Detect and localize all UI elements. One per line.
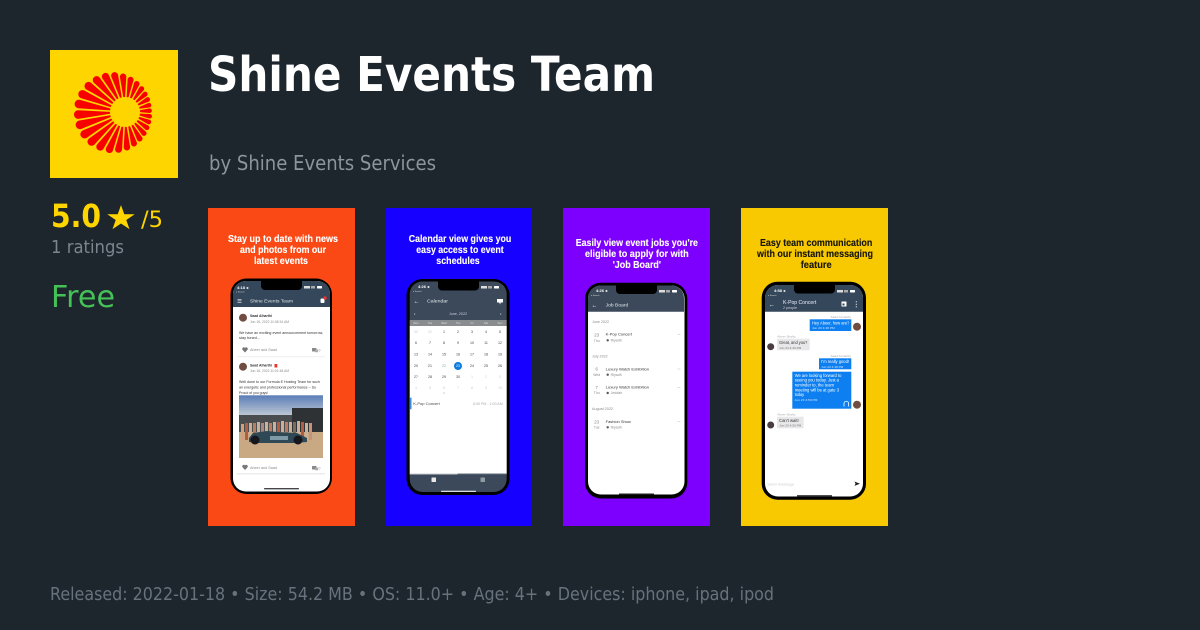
calendar grid: 22 — [442, 364, 446, 368]
calendar grid: 9 — [485, 386, 487, 390]
heading: messaging: Easy team communication — [760, 238, 872, 249]
chat messages: I'm really good! — [821, 359, 849, 364]
heading: calendar: Calendar view gives you — [409, 234, 511, 245]
calendar grid: Sat — [484, 321, 488, 325]
phone: job board: Job Board — [606, 303, 629, 309]
calendar grid: 4 — [485, 330, 487, 334]
phone: messaging: Send message — [767, 482, 794, 486]
job list: August 2022 — [592, 407, 613, 411]
calendar grid: 7 — [429, 341, 431, 345]
rating score: /5 — [141, 208, 163, 233]
heading: messaging — [756, 238, 873, 271]
calendar grid: 3 — [499, 375, 501, 379]
event row: 5:00 PM - 1:00 AM — [473, 402, 503, 406]
calendar grid: 27 — [414, 375, 418, 379]
chat messages: Hey Abeer, how are? — [812, 320, 850, 326]
event row — [410, 398, 503, 409]
heading: job board — [576, 238, 698, 271]
ratings count: 1 ratings — [51, 237, 124, 258]
phone: calendar: ◂ Search — [413, 290, 422, 293]
job list: 7 — [595, 385, 598, 390]
chat messages: Jun 23 4:49 PM — [821, 365, 844, 369]
screenshot 2: calendar — [385, 208, 532, 526]
phone: messaging: K-Pop Concert — [783, 300, 817, 306]
phone: news feed: Proud of you guys! — [239, 390, 268, 395]
phone: messaging — [762, 282, 866, 500]
calendar grid: 28 — [428, 375, 432, 379]
calendar grid: 24 — [470, 364, 474, 368]
calendar grid: 2 — [457, 330, 459, 334]
photo: team with race car — [239, 395, 323, 458]
calendar grid: 7 — [457, 386, 459, 390]
phone: news feed — [230, 278, 332, 494]
phone: news feed: Abeer and Saad — [250, 466, 277, 470]
phone: news feed: Jun 16, 2022 11:08:34 AM — [250, 320, 289, 324]
calendar grid: 12 — [498, 341, 502, 345]
calendar grid: 3 — [471, 330, 473, 334]
calendar grid: 5 — [499, 330, 501, 334]
chat messages: seeing you today. Just a — [795, 378, 840, 383]
heading: calendar — [409, 234, 511, 267]
phone: messaging: ← — [769, 302, 775, 308]
screenshot 4: messaging — [741, 208, 888, 526]
calendar grid: 6 — [443, 386, 445, 390]
phone: news feed: an energetic and professional performance – So — [239, 384, 317, 390]
calendar grid: Tue — [428, 321, 433, 325]
chat messages: today — [795, 392, 805, 397]
calendar grid: 10 — [470, 341, 474, 345]
calendar grid: 15 — [442, 352, 446, 356]
job list: K-Pop Concert — [606, 332, 633, 337]
phone: job board — [585, 283, 687, 498]
phone: calendar: › — [500, 312, 502, 316]
job list: Riyadh — [611, 338, 622, 342]
job list: 23 — [594, 420, 600, 424]
phone: calendar — [406, 279, 510, 495]
phone: news feed: 4:18 ◂ — [237, 285, 249, 290]
calendar grid: 21 — [428, 364, 432, 368]
phone: messaging: ◂ Search — [768, 294, 777, 297]
calendar grid: 26 — [498, 364, 502, 368]
phone: calendar: June, 2022 — [449, 312, 467, 316]
phone: calendar: ← — [414, 299, 420, 305]
chat messages: Jun 23 4:50 PM — [779, 424, 802, 428]
phone: news feed: 0 — [318, 466, 320, 470]
job list — [592, 320, 680, 430]
chat messages: Jun 23 4:50 PM — [795, 398, 818, 402]
calendar grid: 2 — [485, 375, 487, 379]
title: Shine Events Team — [208, 47, 655, 103]
calendar grid: 6 — [415, 341, 417, 345]
calendar grid: 20 — [414, 364, 418, 368]
developer byline: by Shine Events Services — [209, 151, 436, 175]
app icon: red sunburst on yellow — [50, 50, 178, 178]
job list: July 2022 — [592, 354, 608, 358]
calendar grid: 18 — [484, 352, 488, 356]
job list: June 2022 — [592, 320, 609, 324]
calendar grid: 13 — [414, 352, 418, 356]
job list: Jeddah — [611, 391, 622, 395]
job list: Riyadh — [611, 426, 622, 430]
phone: news feed: Saad Alharthi — [250, 364, 272, 368]
calendar grid: 16 — [456, 352, 460, 356]
job list: Fashion Show — [606, 419, 631, 424]
rating score: 5.0 — [51, 197, 101, 235]
phone: news feed: 0 — [318, 348, 320, 352]
calendar grid: 25 — [484, 364, 488, 368]
calendar grid: Thu — [456, 321, 461, 325]
calendar grid: Fri — [470, 321, 474, 325]
rating score: ★ — [105, 198, 137, 237]
calendar grid: 8 — [471, 386, 473, 390]
job list: Luxury Watch Exhibition — [606, 366, 649, 371]
chat messages: Abeer Shafiq — [777, 334, 796, 338]
heading: messaging: feature — [801, 260, 832, 271]
heading: news: Stay up to date with news — [228, 234, 338, 245]
chat messages: Can't wait! — [779, 418, 799, 423]
calendar grid: 4 — [415, 386, 417, 390]
phone: news feed: Jun 16, 2022 11:01:48 AM — [250, 369, 289, 373]
calendar grid: 5 — [429, 386, 431, 390]
chat messages: meeting will be at gate 3 — [795, 387, 840, 392]
job list: Thu — [594, 391, 600, 395]
phone: news feed: Abeer and Saad — [250, 348, 277, 352]
job list: 6 — [595, 366, 598, 372]
footer metadata: Released: 2022-01-18 • Size: 54.2 MB • OS: 11.0+ • Age: 4+ • Devices: iphone, ipad, ipod — [50, 584, 774, 605]
heading: job board: eligible to apply for with — [585, 249, 689, 260]
chat messages — [767, 315, 861, 428]
event row: K-Pop Concert — [413, 401, 441, 406]
phone: calendar: 4:26 ◂ — [418, 284, 430, 289]
calendar grid: Sun — [498, 321, 503, 325]
calendar grid: 17 — [470, 352, 474, 356]
phone: job board: ◂ Search — [591, 294, 600, 297]
heading: news — [228, 234, 338, 267]
calendar grid: 29 — [442, 375, 446, 379]
screenshot 3: job board — [563, 208, 710, 526]
chat messages: reminder to, the team — [795, 382, 834, 388]
chat messages: We are looking forward to — [795, 373, 842, 378]
heading: job board: Easily view event jobs you're — [576, 238, 698, 249]
screenshot 1: news feed — [208, 208, 355, 526]
phone: messaging: 2 people — [783, 306, 797, 310]
calendar grid: 31 — [428, 330, 432, 334]
calendar grid: 9 — [457, 341, 459, 345]
calendar grid: 14 — [428, 352, 432, 356]
calendar grid: 1 — [443, 391, 445, 395]
chat messages: Abeer Shafiq — [777, 412, 796, 416]
calendar grid: 10 — [498, 386, 502, 390]
phone: news feed: Saad Alharthi — [250, 314, 272, 318]
phone: news feed: We have an exciting event announcement tomorrow, — [239, 330, 323, 335]
calendar grid: 11 — [484, 341, 488, 345]
chat messages: Saad Al Harthi — [831, 315, 851, 319]
heading: news: latest events — [254, 256, 308, 267]
phone: calendar: Calendar — [427, 299, 448, 305]
phone: news feed: Well done to our Formula E Hosting Team for such — [239, 379, 320, 384]
heading: calendar: easy access to event — [416, 245, 504, 256]
calendar grid: Wed — [441, 321, 447, 325]
calendar grid: 1 — [443, 330, 445, 334]
phone: calendar: ‹ — [414, 312, 416, 316]
calendar grid: 30 — [456, 375, 460, 379]
calendar grid: 30 — [414, 330, 418, 334]
job list: Tue — [594, 426, 600, 430]
chat messages: Saad Al Harthi — [831, 354, 851, 358]
price: Free — [51, 280, 115, 315]
heading: messaging: with our instant messaging — [756, 249, 873, 260]
phone: news feed: ◂ Search — [236, 290, 245, 294]
phone: news feed: stay tuned... — [239, 335, 260, 340]
heading: job board: 'Job Board' — [613, 260, 661, 271]
job list: Luxury Watch Exhibition — [606, 385, 649, 390]
calendar grid: Mon — [413, 321, 419, 325]
chat messages: Jun 23 4:48 PM — [812, 326, 835, 330]
job list: 23 — [594, 332, 600, 338]
heading: news: and photos from our — [240, 245, 326, 256]
job list: Riyadh — [611, 373, 622, 377]
calendar grid: 19 — [498, 352, 502, 356]
rating score — [51, 197, 163, 237]
calendar grid: 1 — [471, 375, 473, 379]
phone: messaging: 4:58 ◂ — [774, 288, 786, 293]
phone: news feed: Shine Events Team — [250, 298, 293, 304]
phone: job board: ← — [592, 303, 598, 309]
job list: Thu — [594, 339, 600, 343]
chat messages: Jun 23 4:49 PM — [779, 346, 802, 350]
chat messages: Great, and you? — [779, 340, 808, 345]
calendar grid: 23 — [456, 364, 460, 368]
heading: calendar: schedules — [436, 256, 480, 267]
phone: job board: 4:26 ◂ — [596, 288, 608, 293]
calendar grid: 8 — [443, 341, 445, 345]
job list: Wed — [593, 373, 600, 377]
calendar grid — [413, 321, 503, 395]
